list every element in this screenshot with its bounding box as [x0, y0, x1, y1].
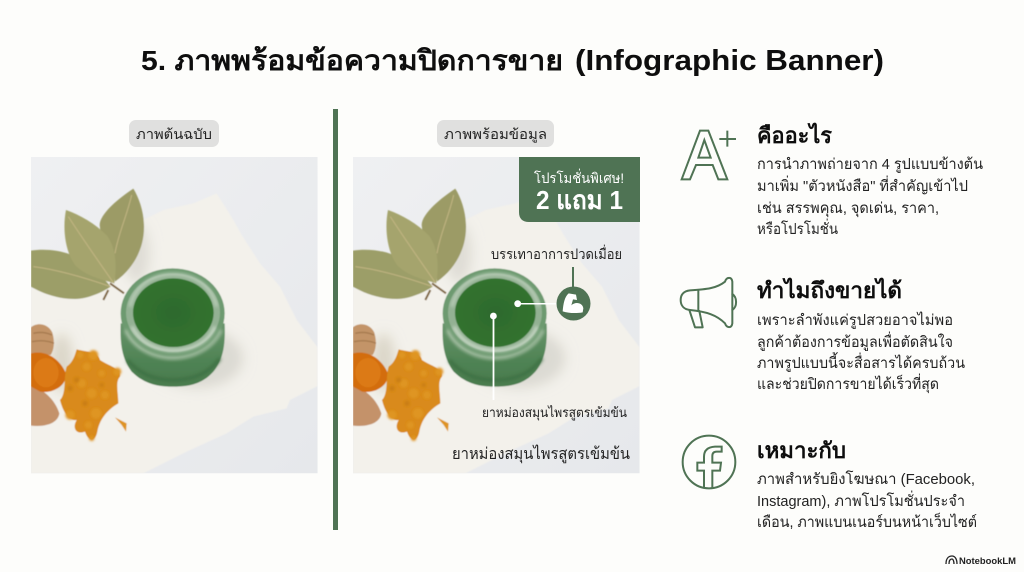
section: what it is: การนำภาพถ่ายจาก 4 รูปแบบข้างต้น — [757, 156, 983, 173]
callout: relieves aches: บรรเทาอาการปวดเมื่อย — [491, 245, 622, 262]
section: why it sells: เพราะลำพังแค่รูปสวยอาจไม่พอ — [757, 311, 953, 329]
product name caption: ยาหม่องสมุนไพรสูตรเข้มข้น — [452, 444, 630, 464]
section: why it sells — [757, 277, 965, 394]
logo: NotebookLM: NotebookLM — [959, 556, 1016, 567]
title: (Infographic Banner) — [575, 45, 884, 77]
promo badge: 2 แถม 1 — [536, 185, 623, 215]
title: 5. ภาพพร้อมข้อความปิดการขาย — [141, 45, 563, 76]
photo: original herbal balm — [31, 157, 318, 473]
section: what it is: หรือโปรโมชั่น — [757, 218, 838, 238]
center divider — [333, 109, 338, 530]
section: suitable for — [757, 438, 977, 531]
section: why it sells: และช่วยปิดการขายได้เร็วที่สุด — [757, 373, 939, 394]
photo: herbal balm with text overlay — [353, 157, 640, 473]
section: suitable for: Instagram), ภาพโปรโมชั่นประจำ — [757, 490, 965, 510]
section: what it is — [757, 122, 983, 238]
section: why it sells: ลูกค้าต้องการข้อมูลเพื่อตัดสินใจ — [757, 331, 953, 351]
label: image with information — [437, 120, 554, 147]
section: what it is: คืออะไร — [757, 122, 832, 148]
label: original image — [129, 120, 219, 147]
icon: flexed arm — [563, 293, 583, 313]
section: what it is: มาเพิ่ม "ตัวหนังสือ" ที่สำคัญเข้าไป — [757, 175, 968, 195]
label: image with information: ภาพพร้อมข้อมูล — [444, 126, 547, 143]
callout: relieves aches — [491, 245, 622, 320]
label: original image: ภาพต้นฉบับ — [136, 126, 212, 142]
section: suitable for: เดือน, ภาพแบนเนอร์บนหน้าเว็บไซต์ — [757, 512, 977, 531]
section: suitable for: เหมาะกับ — [757, 438, 846, 463]
icon: A plus — [682, 131, 736, 179]
section: why it sells: ทำไมถึงขายได้ — [757, 277, 902, 303]
callout: concentrated herbal balm: ยาหม่องสมุนไพรสูตรเข้มข้น — [482, 405, 627, 421]
icon: megaphone — [681, 278, 736, 327]
icon: facebook — [683, 436, 735, 489]
promo badge: โปรโมชั่นพิเศษ! — [534, 169, 624, 186]
section: what it is: เช่น สรรพคุณ, จุดเด่น, ราคา, — [757, 200, 939, 218]
promo badge — [519, 157, 640, 222]
callout: concentrated herbal balm — [482, 313, 627, 421]
section: why it sells: ภาพรูปแบบนี้จะสื่อสารได้ครบถ้วน — [757, 352, 965, 372]
section: suitable for: ภาพสำหรับยิงโฆษณา (Facebook, — [757, 470, 975, 488]
title — [141, 45, 884, 77]
